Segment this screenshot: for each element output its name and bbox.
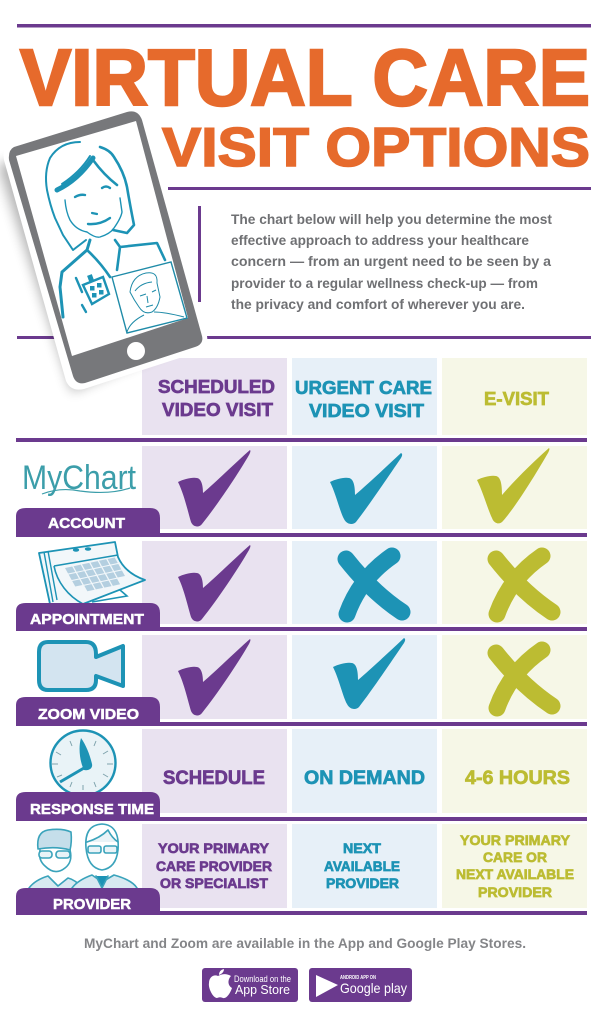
icon: calendar	[39, 542, 145, 604]
column header: urgent care video visit: VIDEO VISIT	[309, 401, 424, 421]
label tab: provider	[16, 888, 160, 915]
column header: e-visit: E-VISIT	[484, 389, 549, 409]
comparison column backgrounds	[142, 358, 587, 908]
badge: Google Play	[309, 968, 412, 1002]
intro text: concern — from an urgent need to be seen by a	[231, 254, 552, 269]
value: next available provider: NEXT	[343, 840, 381, 856]
row: provider	[16, 824, 574, 915]
value: next available provider: AVAILABLE	[324, 858, 400, 874]
badge: Google Play: Google play	[340, 980, 407, 996]
badge: App Store	[202, 968, 298, 1002]
column header: scheduled video visit	[158, 377, 275, 420]
intro text: the privacy and comfort of wherever you are.	[231, 297, 525, 312]
value: primary care or specialist: YOUR PRIMARY	[158, 840, 270, 856]
column header: scheduled video visit: SCHEDULED	[158, 377, 275, 397]
row: zoom video	[16, 638, 552, 726]
row: response time	[16, 730, 570, 820]
value: primary care or specialist: OR SPECIALIST	[160, 875, 268, 891]
label tab: response time	[16, 792, 160, 820]
ID badge	[83, 274, 109, 304]
check: purple	[178, 639, 250, 715]
value: next available provider	[324, 840, 400, 891]
value: primary care or next available: YOUR PRIMARY	[460, 832, 571, 848]
title: Visit Options: VISIT OPTIONS	[162, 116, 590, 178]
label tab: response time: RESPONSE TIME	[30, 801, 154, 818]
label tab: account: ACCOUNT	[48, 515, 125, 532]
icon: MyChart logo: MyChart	[22, 459, 136, 497]
icon: clock	[50, 730, 116, 796]
check: blue	[333, 638, 405, 709]
illustration: phone with video call	[0, 106, 207, 392]
row: appointment	[16, 542, 552, 631]
label tab: zoom video: ZOOM VIDEO	[38, 706, 139, 723]
patient inset photo	[112, 262, 187, 333]
value: on demand: ON DEMAND	[304, 768, 425, 789]
check: purple	[178, 545, 250, 621]
column header: urgent care video visit: URGENT CARE	[295, 378, 432, 398]
badge: App Store: App Store	[235, 982, 290, 997]
label tab: provider: PROVIDER	[53, 896, 131, 913]
intro text: effective approach to address your healthcare	[231, 233, 529, 248]
column header: scheduled video visit: VIDEO VISIT	[162, 400, 273, 420]
intro text: The chart below will help you determine the most	[231, 212, 552, 227]
value: primary care or next available: PROVIDER	[478, 884, 552, 900]
row: MyChart account	[16, 448, 549, 537]
icon: video camera	[39, 642, 123, 690]
value: primary care or next available: NEXT AVAILABLE	[456, 866, 574, 882]
check: blue	[330, 453, 402, 524]
woman doctor line drawing	[46, 142, 165, 317]
icon: providers	[29, 824, 137, 888]
label tab: appointment: APPOINTMENT	[30, 611, 144, 628]
value: primary care or specialist: CARE PROVIDER	[156, 858, 272, 874]
value: primary care or specialist	[156, 840, 272, 891]
footer note: MyChart and Zoom are available in the App and Google Play Stores.	[84, 936, 526, 951]
label tab: account	[16, 508, 160, 537]
check: purple	[178, 450, 250, 526]
intro text: provider to a regular wellness check-up — from	[231, 276, 538, 291]
check: green	[477, 448, 549, 523]
cross: green	[496, 650, 552, 708]
value: 4-6 hours: 4-6 HOURS	[465, 768, 570, 789]
label tab: zoom video	[16, 697, 160, 726]
value: primary care or next available	[456, 832, 574, 900]
cross: green	[496, 556, 552, 614]
badge: App Store: Download on the	[234, 974, 291, 984]
value: next available provider: PROVIDER	[326, 875, 399, 891]
badge: Google Play: ANDROID APP ON	[340, 975, 376, 981]
column header: urgent care video visit	[295, 378, 432, 421]
value: schedule: SCHEDULE	[163, 768, 265, 789]
value: primary care or next available: CARE OR	[483, 849, 547, 865]
intro text	[231, 212, 552, 312]
label tab: appointment	[16, 603, 160, 631]
cross: blue	[346, 556, 402, 614]
title: Virtual Care: VIRTUAL CARE	[20, 33, 590, 122]
